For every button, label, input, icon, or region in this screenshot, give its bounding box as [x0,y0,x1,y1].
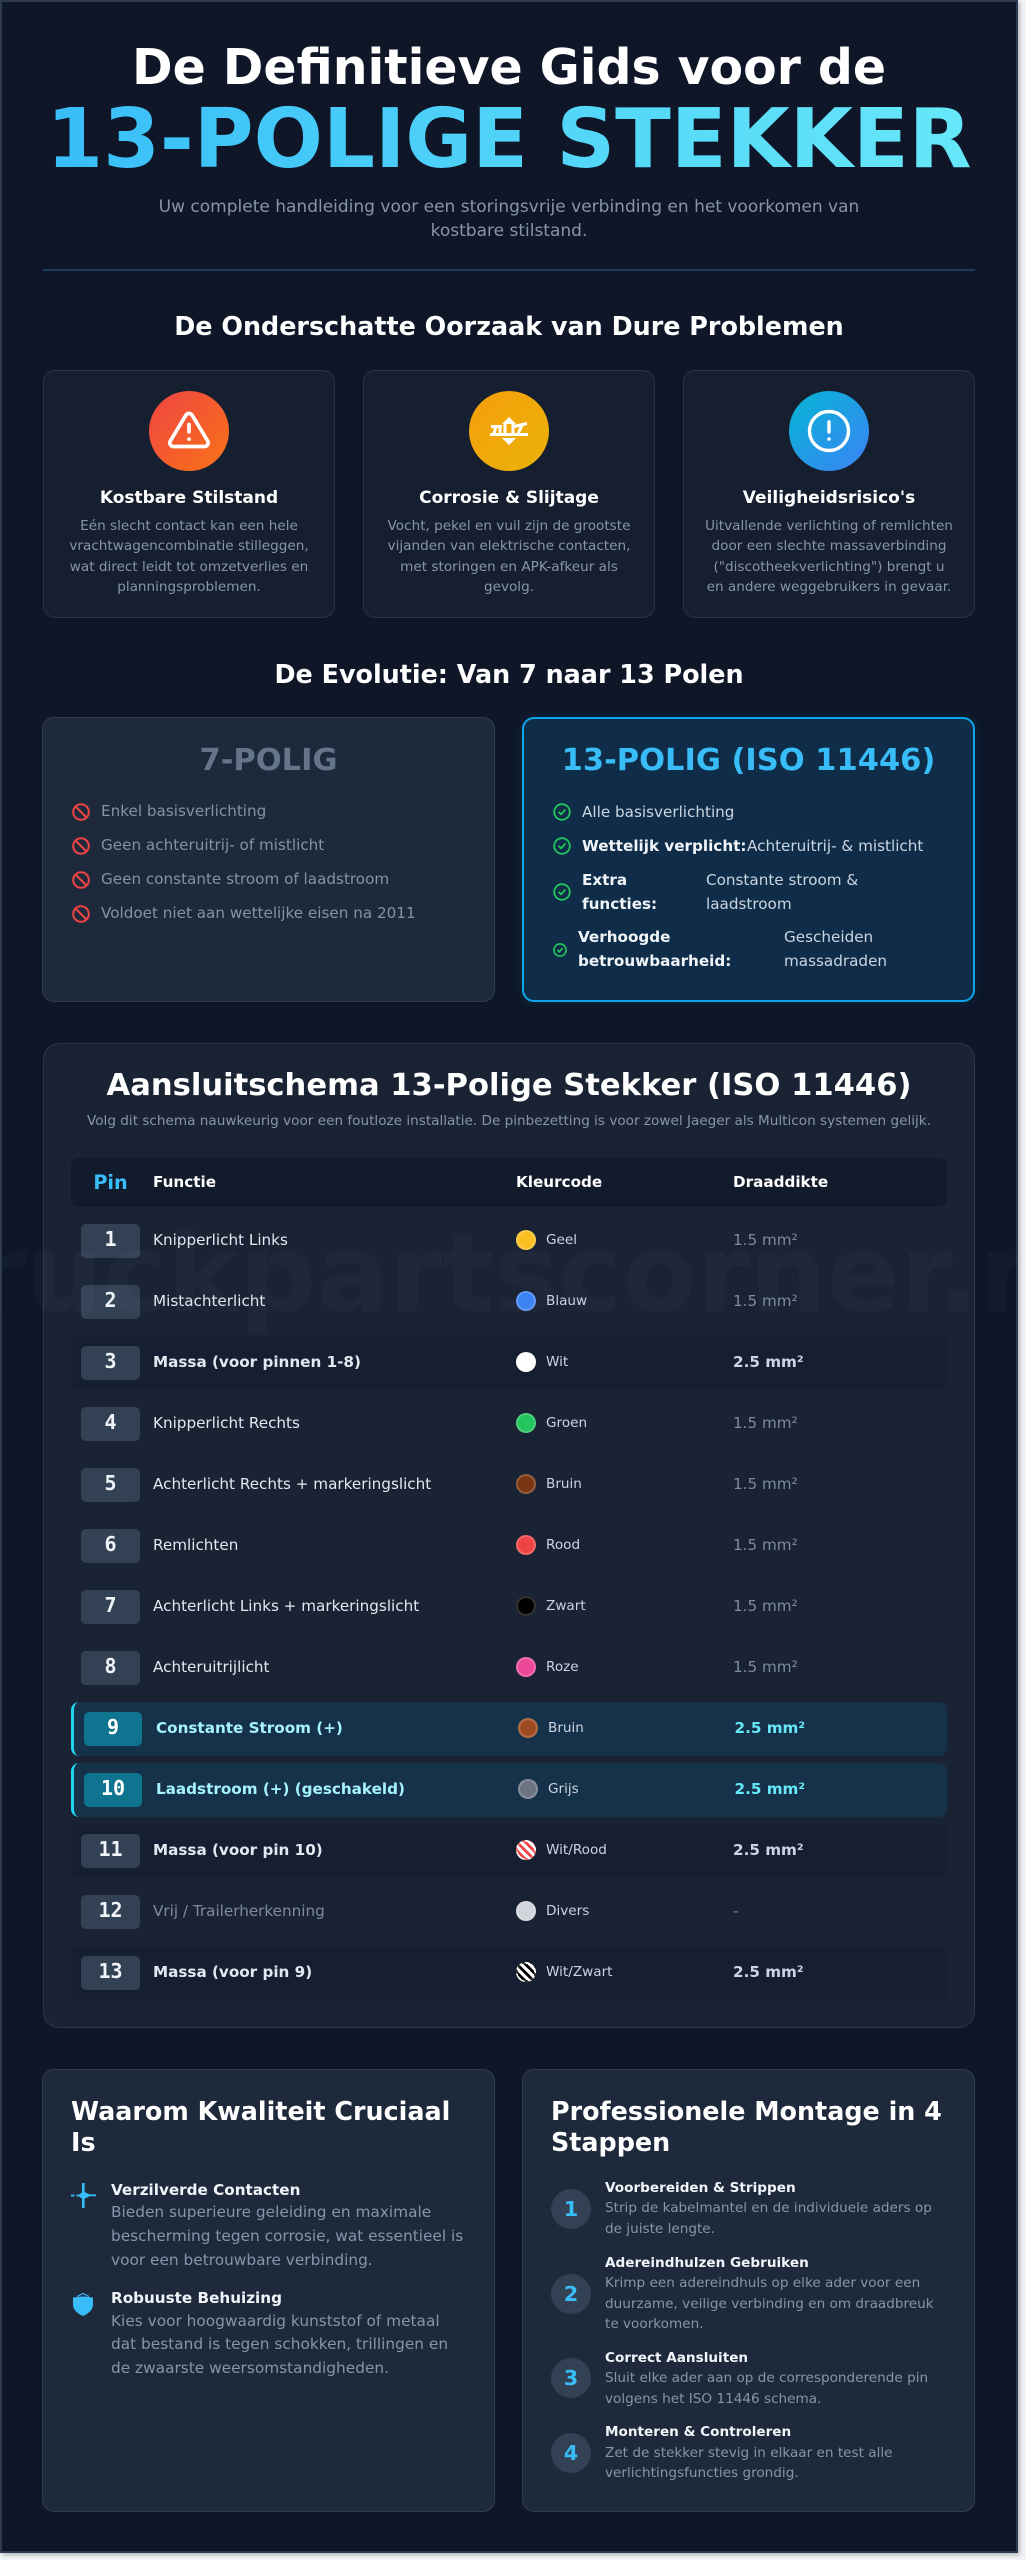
table header: Draaddikte [733,1173,828,1191]
row: pin 9: Bruin [548,1720,584,1736]
row: pin 12: - [733,1902,738,1920]
panel title: 7-POLIG [200,743,337,778]
panel: 7-polig [42,717,495,1002]
icon: warning triangle [149,391,229,471]
list: 7-polig limits: Geen achteruitrij- of mistlicht [101,836,324,854]
row: pin 1 [81,1224,798,1258]
list: 13-polig benefits: Extra [582,871,627,889]
card text: planningsproblemen. [117,579,261,595]
row: pin 3 [71,1336,947,1390]
row: pin 6: 6 [104,1532,117,1556]
step number 3: 3 [564,2366,578,2390]
title line 1: De Definitieve Gids voor de [132,39,886,96]
step 3 text [605,2370,928,2406]
row: pin 7 [81,1590,798,1624]
row: pin 10: 10 [101,1776,125,1800]
row: pin 4: 4 [104,1410,117,1434]
quality heading: Is [71,2127,96,2157]
step 1 text: de juiste lengte. [605,2221,715,2237]
table header: Functie [153,1173,216,1191]
row: pin 5 [81,1468,798,1502]
list: 13-polig benefits: Wettelijk verplicht: [582,837,746,855]
step 1 text [605,2200,932,2237]
list: 7-polig limits: Enkel basisverlichting [101,802,266,820]
table header: Kleurcode [516,1173,602,1191]
row: pin 13: Massa (voor pin 9) [153,1963,312,1981]
row: pin 7: 7 [104,1593,117,1617]
row: pin 8: Achteruitrijlicht [153,1658,270,1676]
list: 13-polig benefits: Verhoogde [578,928,670,946]
icon: corrosion [469,391,549,471]
card title: Kostbare Stilstand [100,488,278,508]
title line 2: 13-POLIGE STEKKER [46,92,972,187]
schema subtitle: Volg dit schema nauwkeurig voor een foutloze installatie. De pinbezetting is voor zowel Jaeger als Multicon systemen gelijk. [87,1113,931,1129]
step 3 text: Sluit elke ader aan op de corresponderende pin [605,2370,928,2386]
row: pin 4: 1.5 mm² [733,1414,798,1432]
step 2 text: te voorkomen. [605,2316,704,2332]
row: pin 12: 12 [98,1898,123,1922]
row: pin 2: Blauw [546,1293,587,1309]
row: pin 3: Wit [546,1354,568,1370]
row: pin 11: Wit/Rood [546,1842,607,1858]
card text: door een slechte massaverbinding [712,538,946,554]
row: pin 1: Knipperlicht Links [153,1231,288,1249]
step 2 text: Krimp een adereindhuls op elke ader voor een [605,2275,920,2291]
card title: Veiligheidsrisico's [743,488,915,508]
row: pin 5: 5 [104,1471,117,1495]
card text [388,518,630,595]
card text: wat direct leidt tot omzetverlies en [70,559,308,575]
subtitle: kostbare stilstand. [431,221,587,241]
card: veiligheid [683,370,975,618]
item text: housing: Kies voor hoogwaardig kunststof of metaal [111,2312,440,2330]
list: 13-polig benefits: betrouwbaarheid: [578,952,731,970]
row: pin 6: 1.5 mm² [733,1536,798,1554]
row: pin 11: 2.5 mm² [733,1841,804,1859]
row: pin 13 [71,1946,947,2000]
row: pin 7: Achterlicht Links + markeringslicht [153,1597,419,1615]
row: pin 8 [81,1651,798,1685]
quality heading [71,2096,450,2157]
step 4 text: Zet de stekker stevig in elkaar en test alle [605,2445,893,2461]
row: pin 5: 1.5 mm² [733,1475,798,1493]
item text: contacts [111,2203,463,2269]
card: corrosie [363,370,655,618]
item text: housing [111,2312,448,2377]
panel title: 13-POLIG (ISO 11446) [562,743,935,778]
row: pin 9: Constante Stroom (+) [156,1719,343,1737]
card text: vrachtwagencombinatie stilleggen, [69,538,309,554]
heading: problems: De Onderschatte Oorzaak van Dure Problemen [174,311,844,341]
row: pin 2: 2 [104,1288,117,1312]
row: pin 8: Roze [546,1659,579,1675]
row: pin 9: 2.5 mm² [734,1719,805,1737]
row: pin 5: Achterlicht Rechts + markeringslicht [153,1475,431,1493]
list: 13-polig benefits: massadraden [784,952,887,970]
row: pin 3: Massa (voor pinnen 1-8) [153,1353,361,1371]
row: pin 2 [81,1285,798,1319]
item text: housing: de zwaarste weersomstandigheden. [111,2359,389,2377]
row: pin 11 [71,1824,947,1878]
steps heading: Professionele Montage in 4 [551,2096,942,2126]
step number 1: 1 [564,2197,578,2221]
row: pin 3: 2.5 mm² [733,1353,804,1371]
row: pin 7: 1.5 mm² [733,1597,798,1615]
row: pin 8: 8 [104,1654,117,1678]
step number 3 [551,2358,591,2398]
list: 13-polig benefits: functies: [582,895,657,913]
icon: contacts [71,2183,96,2208]
card text: ("discotheekverlichting") brengt u [713,559,945,575]
row: pin 11: Massa (voor pin 10) [153,1841,323,1859]
row: pin 10 [71,1763,947,1817]
step 2 title: Adereindhulzen Gebruiken [605,2255,809,2271]
row: pin 13: Wit/Zwart [546,1964,613,1980]
row: pin 6: Rood [546,1537,580,1553]
row: pin 1: 1 [104,1227,117,1251]
item text: contacts: voor een betrouwbare verbinding. [111,2251,373,2269]
row: pin 10: Grijs [548,1781,579,1797]
table header [71,1158,947,1207]
step 4 text: verlichtingsfuncties grondig. [605,2465,799,2481]
panel: wiring schema [43,1043,975,2028]
step 2 text [605,2275,934,2332]
row: pin 5: Bruin [546,1476,582,1492]
list: 13-polig benefits: Achteruitrij- & mistlicht [747,837,923,855]
item text: housing: dat bestand is tegen schokken, trillingen en [111,2335,448,2353]
row: pin 12: Divers [546,1903,589,1919]
card text: Uitvallende verlichting of remlichten [705,518,953,534]
row: pin 4: Groen [546,1415,587,1431]
row: pin 6: Remlichten [153,1536,238,1554]
step 4 title: Monteren & Controleren [605,2424,791,2440]
card text: gevolg. [484,579,534,595]
row: pin 12: Vrij / Trailerherkenning [153,1902,325,1920]
row: pin 7: Zwart [546,1598,586,1614]
list: 13-polig benefits: Alle basisverlichting [582,803,734,821]
panel: quality [42,2069,495,2512]
row: pin 2: 1.5 mm² [733,1292,798,1310]
card: kostbare stilstand [43,370,335,618]
row: pin 4 [81,1407,798,1441]
row: pin 1: 1.5 mm² [733,1231,798,1249]
steps heading [551,2096,942,2157]
schema title: Aansluitschema 13-Polige Stekker (ISO 11446) [107,1068,911,1103]
row: pin 3: 3 [104,1349,117,1373]
heading: evolution: De Evolutie: Van 7 naar 13 Polen [274,659,744,689]
table header: Pin [93,1171,128,1194]
list: 13-polig benefits: Constante stroom & [706,871,858,889]
step 2 text: duurzame, veilige verbinding en om draadbreuk [605,2296,934,2312]
row: pin 13: 2.5 mm² [733,1963,804,1981]
row: pin 10: Laadstroom (+) (geschakeld) [156,1780,405,1798]
step number 4: 4 [564,2441,578,2465]
row: pin 6 [81,1529,798,1563]
icon: shield [73,2293,93,2316]
item text: contacts: Bieden superieure geleiding en maximale [111,2203,431,2221]
step number 2 [551,2274,591,2314]
subtitle [159,197,859,241]
icon: alert circle [789,391,869,471]
card text: en andere weggebruikers in gevaar. [707,579,951,595]
list: 13-polig benefits: Gescheiden [784,928,873,946]
item title: contacts: Verzilverde Contacten [111,2181,300,2199]
row: pin 8: 1.5 mm² [733,1658,798,1676]
list: 13-polig benefits: laadstroom [706,895,792,913]
step 3 text: volgens het ISO 11446 schema. [605,2390,821,2406]
row: pin 1: Geel [546,1232,577,1248]
list: 7-polig limits: Geen constante stroom of laadstroom [101,870,389,888]
panel: installation steps [522,2069,975,2512]
row: pin 9: 9 [107,1715,119,1739]
item title: housing: Robuuste Behuizing [111,2289,282,2307]
row: pin 9 [71,1702,947,1756]
step number 1 [551,2189,591,2229]
row: pin 10: 2.5 mm² [734,1780,805,1798]
card text: Eén slecht contact kan een hele [80,518,298,534]
list: 7-polig limits [72,802,416,923]
card text: vijanden van elektrische contacten, [388,538,630,554]
row: pin 2: Mistachterlicht [153,1292,265,1310]
row: pin 13: 13 [98,1959,123,1983]
card title: Corrosie & Slijtage [419,488,599,508]
row: pin 4: Knipperlicht Rechts [153,1414,300,1432]
row: pin 11: 11 [98,1837,123,1861]
panel: 13-polig [522,717,975,1002]
step 1 text: Strip de kabelmantel en de individuele aders op [605,2200,932,2216]
step 3 title: Correct Aansluiten [605,2350,748,2366]
step number 2: 2 [564,2282,578,2306]
card text: met storingen en APK-afkeur als [400,559,618,575]
step 1 title: Voorbereiden & Strippen [605,2180,796,2196]
card text: Vocht, pekel en vuil zijn de grootste [388,518,630,534]
card text [705,518,953,595]
list: 7-polig limits: Voldoet niet aan wettelijke eisen na 2011 [101,904,416,922]
row: pin 12 [81,1895,738,1929]
step 4 text [605,2445,893,2481]
item text: contacts: bescherming tegen corrosie, wat essentieel is [111,2227,463,2245]
card text [69,518,309,595]
steps heading: Stappen [551,2127,670,2157]
subtitle: Uw complete handleiding voor een storingsvrije verbinding en het voorkomen van [159,197,859,217]
quality heading: Waarom Kwaliteit Cruciaal [71,2096,450,2126]
list: 13-polig benefits [553,803,923,970]
step number 4 [551,2433,591,2473]
